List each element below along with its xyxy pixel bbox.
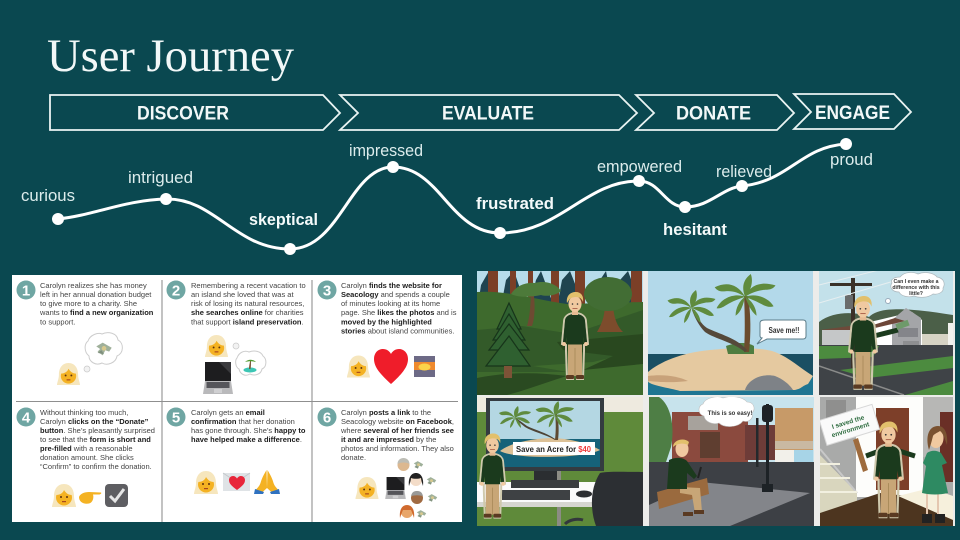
speech bubble: save me: Save me!! <box>768 325 800 335</box>
comic 3: suburban street <box>819 270 953 395</box>
thought bubble <box>886 272 944 304</box>
thought bubble: difference with this <box>892 285 940 291</box>
step 6: Seacology website on Facebook, <box>341 417 454 426</box>
protest sign: environment <box>831 421 871 439</box>
step 1: wants to find a new organization <box>40 308 153 317</box>
step 1 <box>16 280 154 385</box>
step 2: that support island preservation. <box>191 318 304 326</box>
step 5: 5 <box>172 410 180 426</box>
step 3: stories about island communities. <box>341 326 454 336</box>
step 6 <box>318 408 454 518</box>
comic 6: doorway with sign <box>819 397 953 526</box>
step 5 <box>166 408 306 494</box>
step 2: she searches online for charities <box>191 308 304 317</box>
step 6: where several of her friends see <box>341 426 454 435</box>
journey phase arrows <box>50 94 911 130</box>
emotion label: curious: curious <box>21 186 75 205</box>
step 1: 1 <box>22 282 30 300</box>
thought bubble <box>699 397 754 427</box>
thought bubble: Can I even make a <box>894 279 939 285</box>
phase label: engage: ENGAGE <box>815 103 890 124</box>
step 4: button. She’s pleasantly surprised <box>40 426 155 435</box>
step 6: it and are impressed by the <box>341 435 436 444</box>
step 4: donation amount. She clicks <box>40 453 134 462</box>
step 3: Seacology and spends a couple <box>341 290 450 299</box>
step 6: photos and information. They also <box>341 444 454 453</box>
step 4: pre-filled with a reasonable <box>40 444 133 453</box>
step 5: Carolyn gets an email <box>191 408 265 417</box>
panel: storyboard steps <box>12 275 462 522</box>
step 3: 3 <box>323 282 331 300</box>
thought bubble: This is so easy! <box>708 411 752 417</box>
step 6: Carolyn posts a link to the <box>341 408 431 417</box>
woman character <box>922 426 948 523</box>
step 2: Remembering a recent vacation to <box>191 281 306 290</box>
step 2: 2 <box>172 282 180 300</box>
step 5: confirmation that her donation <box>191 417 295 426</box>
speech bubble: save me <box>757 320 806 344</box>
step 4 <box>16 408 155 507</box>
step 6: 6 <box>323 410 331 426</box>
ad banner: Save an Acre for $40 <box>516 444 591 454</box>
step 4: 4 <box>22 410 31 426</box>
step 1: to give more to a charity. She <box>40 299 137 308</box>
step 4: “Confirm” to confirm the donation. <box>40 462 152 471</box>
emotion label: hesitant: hesitant <box>663 220 727 239</box>
step 6: donate. <box>341 453 366 462</box>
step 4: Carolyn clicks on the “Donate” <box>40 417 148 426</box>
title: User Journey <box>47 30 294 82</box>
comic 2: island <box>648 271 813 395</box>
step 4: Without thinking too much, <box>40 408 128 417</box>
step 2: an island she loved that was at <box>191 290 294 299</box>
panel: comic storyboard <box>477 270 955 526</box>
emotion label: impressed: impressed <box>349 141 423 160</box>
comic 5: town bench <box>649 397 814 526</box>
comic 1: forest <box>477 271 643 395</box>
emotion label: frustrated: frustrated <box>476 194 554 213</box>
step 2: risk of losing its natural resources, <box>191 299 304 308</box>
emotion label: intrigued: intrigued <box>128 168 193 187</box>
protest sign <box>819 404 880 445</box>
step 5: have helped make a difference. <box>191 435 302 444</box>
emotion label: proud: proud <box>830 150 873 169</box>
emotion label: relieved: relieved <box>716 162 772 181</box>
emotion label: empowered: empowered <box>597 157 682 176</box>
emotion curve <box>52 138 852 255</box>
protest sign: I saved the <box>831 414 866 431</box>
step 3: Carolyn finds the website for <box>341 281 442 290</box>
step 3: of minutes looking at its home <box>341 299 440 308</box>
thought bubble: little? <box>909 291 923 297</box>
step 1: to support. <box>40 318 75 326</box>
step 1: Carolyn realizes she has money <box>40 281 147 290</box>
step 2 <box>166 280 306 394</box>
phase label: discover: DISCOVER <box>137 104 229 124</box>
step 3: moved by the highlighted <box>341 318 432 326</box>
phase label: evaluate: EVALUATE <box>442 104 534 124</box>
step 5: has gone through. She’s happy to <box>191 426 306 435</box>
step 4: to see that the form is short and <box>40 435 151 444</box>
step 3: page. She likes the photos and is <box>341 308 456 317</box>
step 1: left in her annual donation budget <box>40 290 152 299</box>
comic 4: computer desk <box>477 397 643 526</box>
emotion label: skeptical: skeptical <box>249 210 318 229</box>
step 3 <box>318 280 457 384</box>
phase label: donate: DONATE <box>676 104 751 124</box>
